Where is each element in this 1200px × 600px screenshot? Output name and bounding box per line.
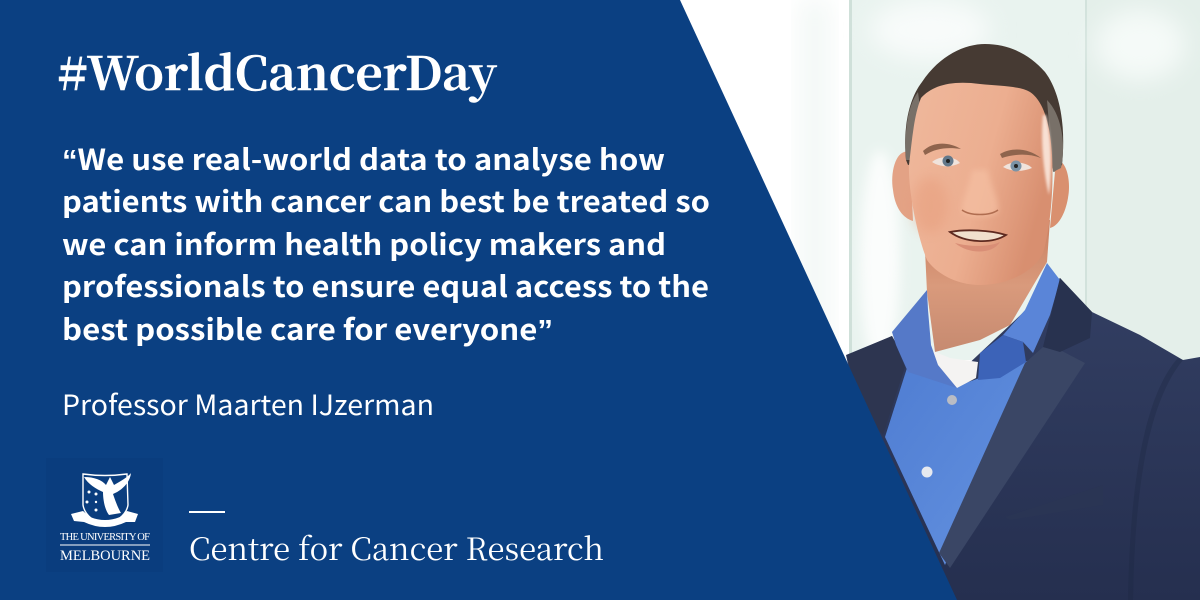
- quote text: professionals to ensure equal access to the: [62, 264, 709, 306]
- face highlight: [1042, 115, 1051, 195]
- left ear: [892, 152, 913, 221]
- quote text: patients with cancer can best be treated so: [62, 179, 710, 221]
- neck: [925, 220, 1050, 352]
- eyes: [932, 156, 1032, 172]
- quote text: we can inform health policy makers and: [62, 222, 666, 264]
- photo background: blurred office windows: [670, 0, 1200, 600]
- collar inner fold: [978, 335, 1026, 380]
- attribution: Professor Maarten IJzerman: [62, 384, 434, 424]
- shirt body: [885, 360, 1030, 565]
- face: [909, 83, 1053, 285]
- jacket left shoulder: [847, 336, 905, 435]
- logo wordmark: THE UNIVERSITY OF: [60, 532, 150, 543]
- white undershirt: [933, 351, 978, 388]
- cheek blush: [912, 177, 948, 233]
- University of Melbourne logo: [46, 458, 163, 572]
- jacket: [846, 278, 1200, 600]
- quote text: “We use real-world data to analyse how: [62, 137, 665, 179]
- University of Melbourne logo: MELBOURNE: [60, 548, 150, 564]
- grey temples: [906, 92, 1063, 172]
- nose: [962, 170, 998, 216]
- centre name: Centre for Cancer Research: [189, 524, 604, 569]
- upper lapel: [1043, 278, 1092, 352]
- portrait of Professor Maarten IJzerman: [846, 44, 1200, 600]
- jacket sleeve shadow: [1128, 358, 1183, 600]
- right ear: [1050, 160, 1069, 228]
- lower lip: [955, 242, 1000, 252]
- shirt buttons: [922, 395, 957, 478]
- eyebrows: [923, 144, 1041, 158]
- blue diagonal panel: [0, 0, 957, 600]
- quote text: best possible care for everyone ”: [62, 307, 553, 349]
- mouth: [950, 230, 1006, 241]
- crest motto ribbon: [71, 511, 138, 527]
- crest shield: [83, 474, 128, 526]
- short divider dash: [189, 511, 225, 513]
- crest stars: [86, 490, 98, 512]
- quote text: [62, 137, 710, 349]
- shirt collar right: [1003, 263, 1060, 353]
- jacket pocket: [1005, 485, 1103, 520]
- jacket lapel: [939, 347, 1085, 568]
- crest winged figure: [84, 473, 131, 515]
- hashtag heading: #WorldCancerDay: [58, 38, 497, 104]
- shirt collar left: [892, 290, 957, 388]
- hair: [905, 44, 1063, 172]
